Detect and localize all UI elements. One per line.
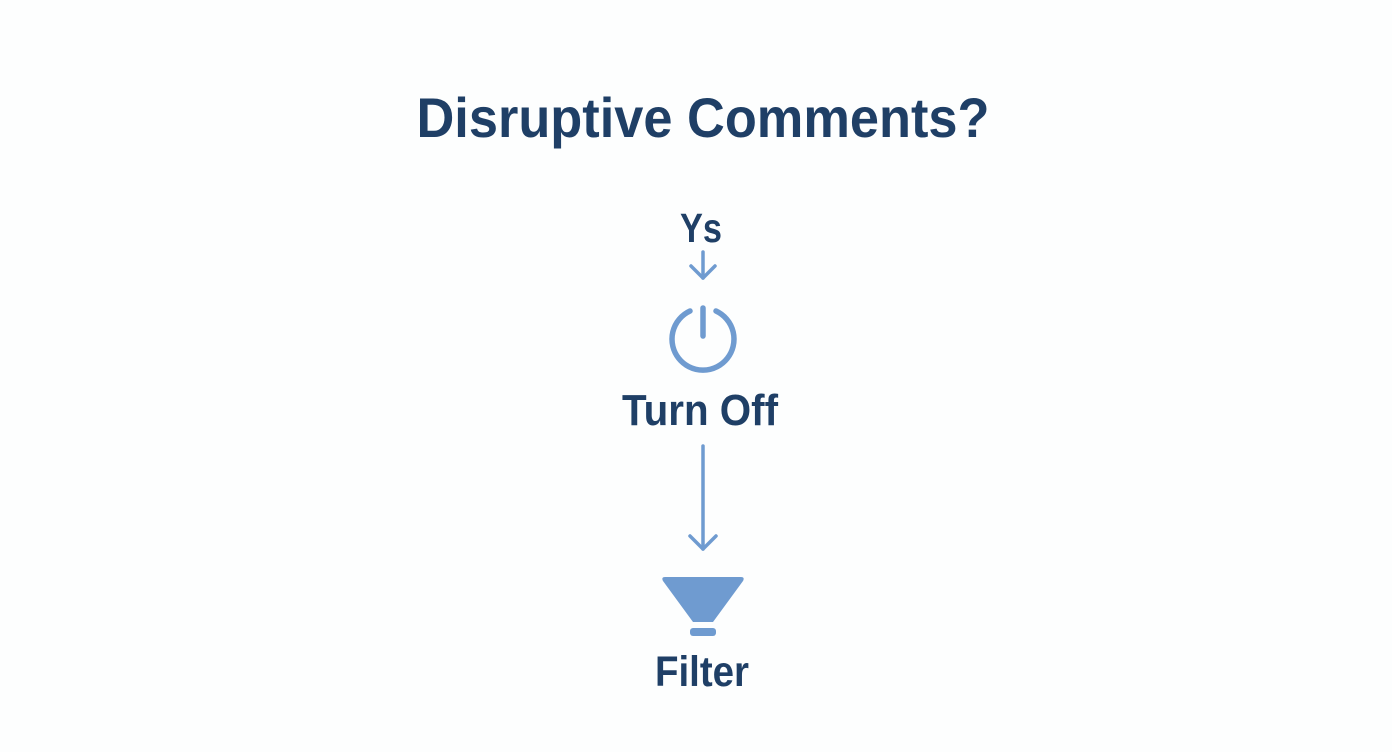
icon: power (672, 308, 734, 370)
label: Ys: Ys (680, 205, 722, 251)
label: Turn Off: Turn Off (622, 386, 778, 435)
arrow: long (690, 446, 716, 549)
title: Disruptive Comments? (416, 86, 990, 149)
icon: filter funnel (662, 577, 744, 636)
arrow: short (691, 252, 715, 278)
label: Filter: Filter (655, 648, 749, 696)
